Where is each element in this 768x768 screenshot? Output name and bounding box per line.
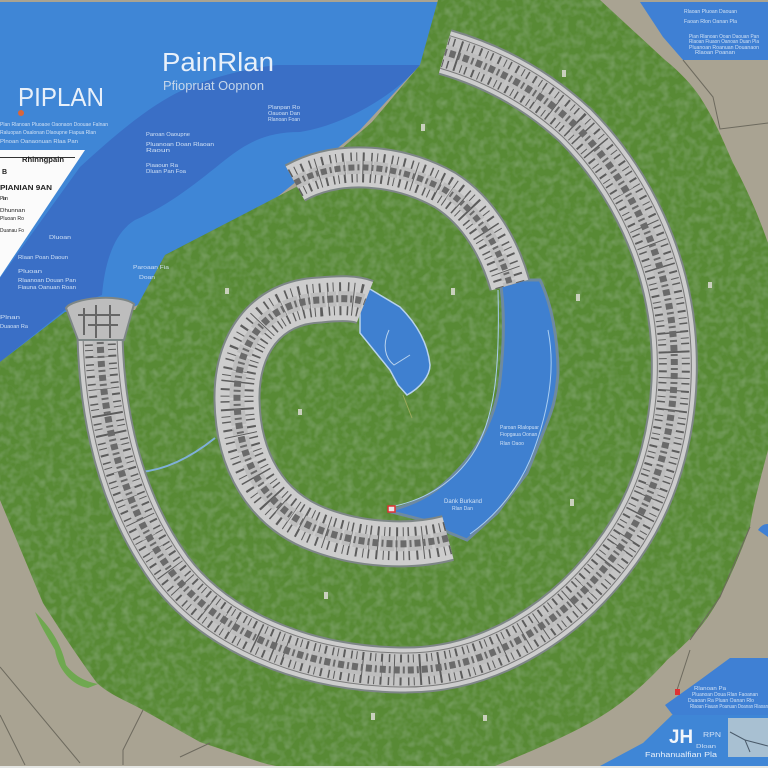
labels on deep channel: Rlaan Poan Daoun [18, 255, 68, 261]
labels on deep channel: Oauoan Dan [268, 111, 300, 117]
river: central crescent: Rlan Dan [452, 506, 473, 512]
panel: bottom-right legend: Fanhanualfian Pla [645, 752, 717, 759]
labels on deep channel [0, 105, 300, 330]
labels on deep channel: Paroaan Fia [133, 265, 169, 271]
labels on deep channel: Paroan Oaoupne [146, 132, 190, 138]
main title: PainRlan [162, 49, 274, 77]
small water mark: right edge [758, 524, 768, 537]
panel: white legend card [0, 150, 85, 277]
panel: bottom-right legend: JH [669, 727, 693, 748]
road: top-right [683, 60, 768, 129]
water: deep channel [0, 65, 420, 362]
labels on deep channel: Pluanoan Doan Rlaoan [146, 142, 214, 148]
intro text block: Plan Rlanoan Pluoaoe Oaonaon Doouae Falnan [0, 122, 108, 128]
intro text block [0, 122, 108, 145]
intro text block: Raluopan Oaalonan Dlaoupne Fiapua Rlan [0, 130, 96, 136]
panel: white legend card: Plan [0, 196, 8, 202]
panel: white legend card: Rhinngpain [22, 157, 64, 164]
labels on deep channel: Fiauna Oanuan Roan [18, 285, 76, 291]
river: central crescent: Dank Burkand [444, 499, 482, 505]
panel: bottom-right legend: RPN [703, 732, 721, 739]
side title: PIPLAN [18, 82, 104, 112]
panel: white legend card: Dhunnan [0, 208, 25, 214]
labels on deep channel: Dluoan [49, 235, 71, 241]
river: central crescent [388, 280, 558, 540]
panel: white legend card: Duanau Fo [0, 228, 24, 234]
outer spiral city band [100, 52, 674, 670]
labels on deep channel: Piaaoun Ra [146, 163, 178, 169]
labels on deep channel: Planpan Ro [268, 105, 300, 111]
title marker [18, 110, 24, 116]
river marker [388, 506, 395, 512]
labels on deep channel: Plnan [0, 315, 20, 321]
labels on deep channel: Duaoan Ra [0, 324, 28, 330]
labels on deep channel: Raoun [146, 148, 170, 154]
river: central crescent: Rlan Oaoo [500, 441, 524, 447]
labels on deep channel: Doan [139, 275, 155, 281]
panel: white legend card: PIANIAN 9AN [0, 183, 52, 192]
panel: white legend card: B [2, 169, 7, 176]
panel: bottom-right water note: Rlanoan Pa [694, 686, 726, 692]
inner spiral city band [237, 299, 448, 544]
patch: bottom-left meadow [35, 612, 98, 688]
roads: bottom [0, 527, 750, 765]
river: central crescent: Fiopgaua Oonan [500, 432, 537, 438]
intro text block: Plnoan Oanaonuan Rlaa Pan [0, 139, 78, 145]
panel: bottom-right water note: Pluanoan Doua Rlan Faoanan [692, 692, 758, 698]
tree markers [225, 70, 712, 721]
labels on deep channel: Pluoan [18, 269, 42, 275]
labels on deep channel: Rlaanoan Douan Pan [18, 278, 76, 284]
inset map [728, 718, 768, 757]
panel: top-right water note: Rlaoan Poanan [695, 50, 735, 56]
panel: top-right water note: Faoan Rlon Oanan Pla [684, 19, 737, 25]
outer band head [66, 298, 134, 340]
panel: top-right water note: Pian Rlanoan Ooan Daouan Pan [689, 34, 759, 40]
panel: top-right water note [640, 2, 768, 60]
bottom edge strip [0, 766, 768, 768]
panel: top-right water note: Pluanoan Roanuan Douanaon [689, 45, 759, 51]
panel: white legend card: Pluoan Ro [0, 216, 24, 222]
panel: bottom-right legend: Dloan [696, 744, 716, 750]
labels on deep channel: Rlanoan Foan [268, 117, 300, 123]
lake: inner spiral [360, 283, 430, 418]
panel: bottom-right legend [600, 715, 768, 766]
panel: top-right water note: Rlaoan Pluoan Daouan [684, 9, 737, 15]
middle spiral city band [295, 167, 510, 285]
panel: top-right water note: Rlaoan Fiuaon Oanoan Duan Pla [689, 39, 759, 45]
panel: bottom-right water note: Duaoan Ra Pluan Oanan Rlo [688, 698, 754, 704]
river: central crescent: Paroan Rlalopuar [500, 425, 539, 431]
water: upper-left bay [0, 2, 440, 362]
panel: bottom-right water note [665, 658, 768, 718]
labels on deep channel: Dluan Pan Foa [146, 169, 186, 175]
stream [140, 438, 215, 472]
subtitle: Pfiopruat Oopnon [163, 79, 264, 93]
location pin [675, 689, 680, 695]
